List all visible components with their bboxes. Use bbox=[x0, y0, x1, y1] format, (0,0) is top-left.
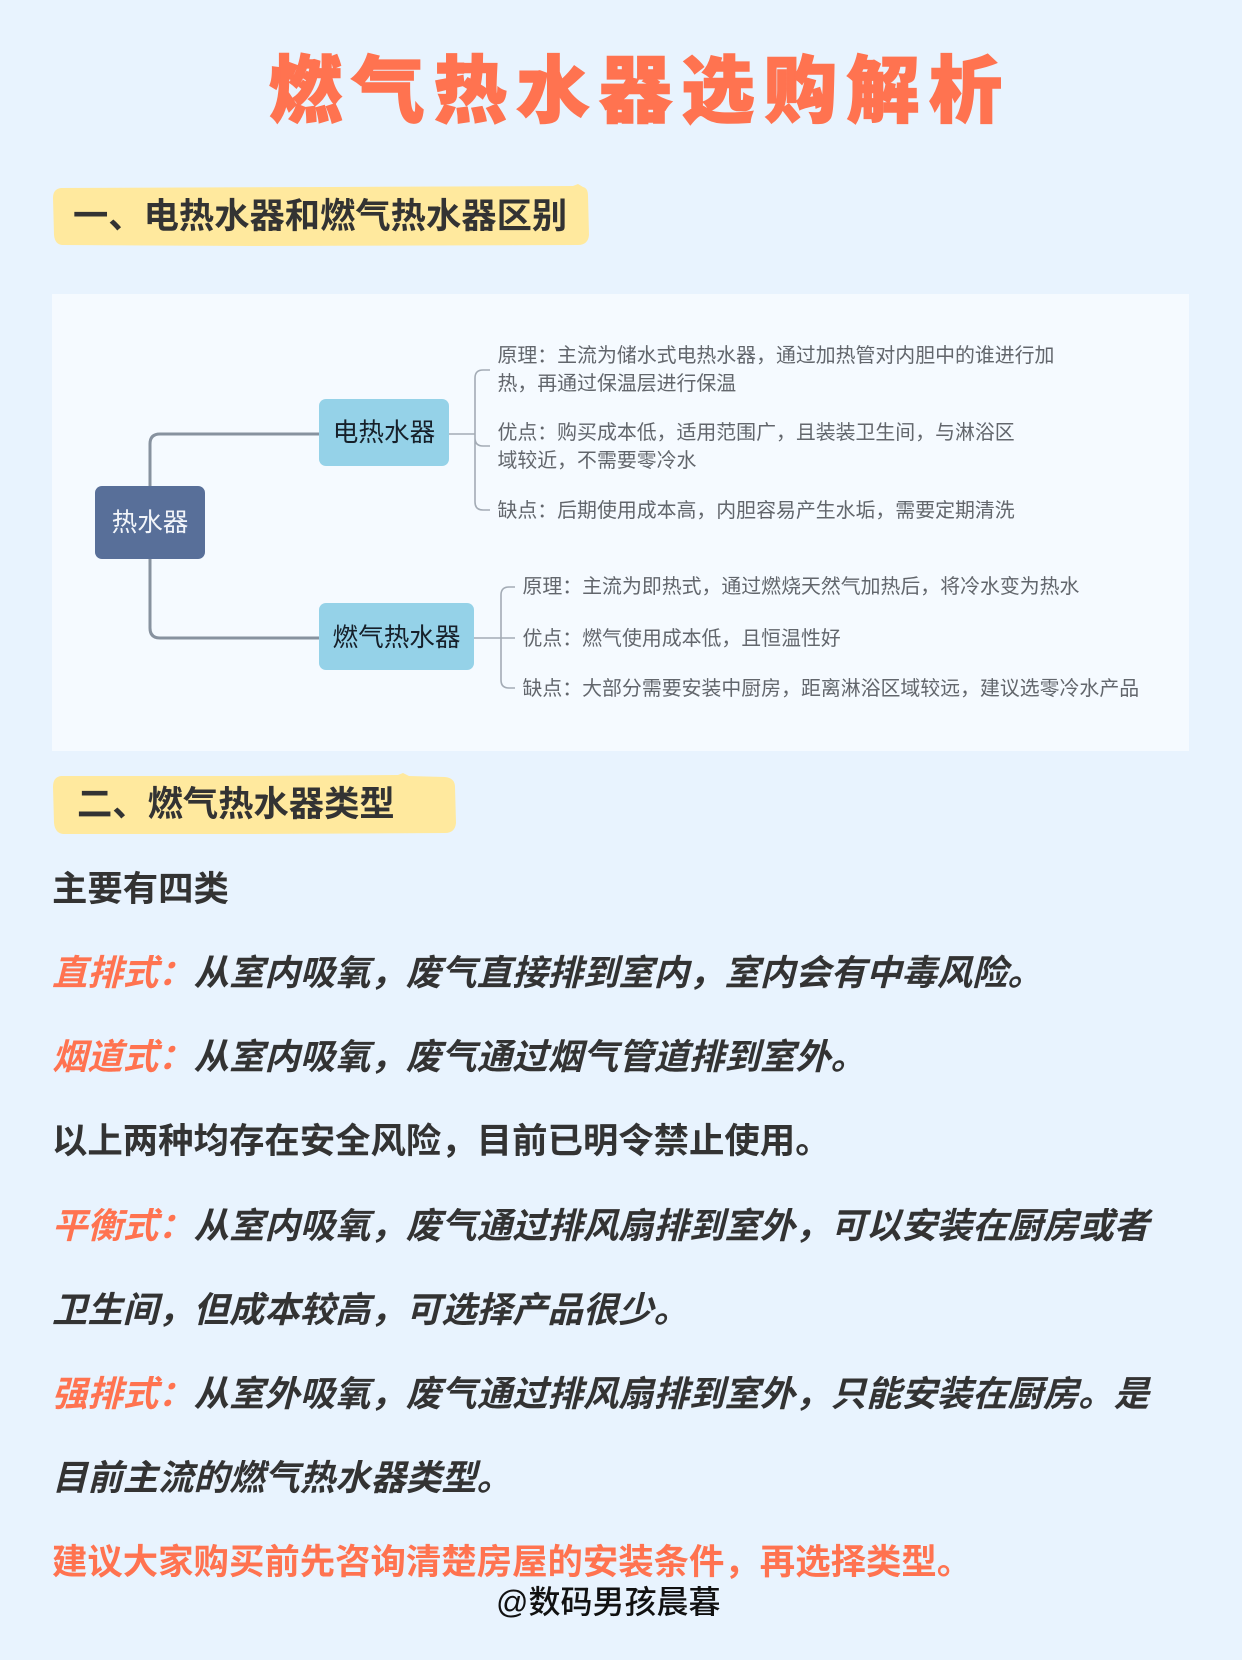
node: gas bbox=[319, 603, 474, 670]
signature: @数码男孩晨暮 bbox=[496, 1584, 720, 1620]
electric: principle line 2: 热，再通过保温层进行保温 bbox=[498, 373, 736, 395]
root node: 热水器 bbox=[112, 509, 188, 537]
node: electric: 电热水器 bbox=[333, 419, 435, 447]
electric: cons: 缺点：后期使用成本高，内胆容易产生水垢，需要定期清洗 bbox=[498, 500, 1015, 522]
type: forced exhaust: 强排式：从室外吸氧，废气通过排风扇排到室外，只能安装在厨房。是 bbox=[52, 1374, 1149, 1414]
electric: pros: 优点：购买成本低，适用范围广，且装装卫生间，与淋浴区 bbox=[498, 422, 1015, 444]
safety note: 以上两种均存在安全风险，目前已明令禁止使用。 bbox=[52, 1121, 831, 1161]
type: balanced: 平衡式：从室内吸氧，废气通过排风扇排到室外，可以安装在厨房或者 bbox=[52, 1206, 1149, 1246]
type: balanced line 2: 卫生间，但成本较高，可选择产品很少。 bbox=[52, 1290, 689, 1330]
section heading: types bbox=[53, 773, 456, 834]
electric: pros line 2: 域较近，不需要零冷水 bbox=[498, 450, 696, 472]
node: electric bbox=[319, 399, 449, 466]
intro line: 主要有四类 bbox=[52, 869, 229, 909]
heading text: 二、燃气热水器类型 bbox=[77, 785, 395, 824]
gas: principle: 原理：主流为即热式，通过燃烧天然气加热后，将冷水变为热水 bbox=[522, 576, 1079, 598]
connector lines bbox=[148, 369, 515, 689]
heading text: 一、电热水器和燃气热水器区别 bbox=[73, 197, 567, 236]
title: 燃气热水器选购解析 bbox=[269, 51, 1012, 132]
gas: cons: 缺点：大部分需要安装中厨房，距离淋浴区域较远，建议选零冷水产品 bbox=[522, 678, 1139, 700]
recommendation: 建议大家购买前先咨询清楚房屋的安装条件，再选择类型。 bbox=[52, 1542, 972, 1582]
node: gas: 燃气热水器 bbox=[332, 624, 460, 652]
root node bbox=[95, 486, 205, 559]
highlight tag bbox=[53, 184, 589, 246]
panel: mind map bbox=[52, 294, 1189, 751]
section heading: difference bbox=[53, 184, 589, 246]
electric: principle: 原理：主流为储水式电热水器，通过加热管对内胆中的谁进行加 bbox=[498, 345, 1054, 367]
gas: pros: 优点：燃气使用成本低，且恒温性好 bbox=[522, 628, 841, 650]
highlight tag bbox=[53, 773, 456, 834]
type: forced exhaust line 2: 目前主流的燃气热水器类型。 bbox=[52, 1458, 512, 1498]
type: direct exhaust: 直排式：从室内吸氧，废气直接排到室内，室内会有中毒风险。 bbox=[52, 953, 1043, 993]
type: flue: 烟道式：从室内吸氧，废气通过烟气管道排到室外。 bbox=[52, 1037, 866, 1077]
